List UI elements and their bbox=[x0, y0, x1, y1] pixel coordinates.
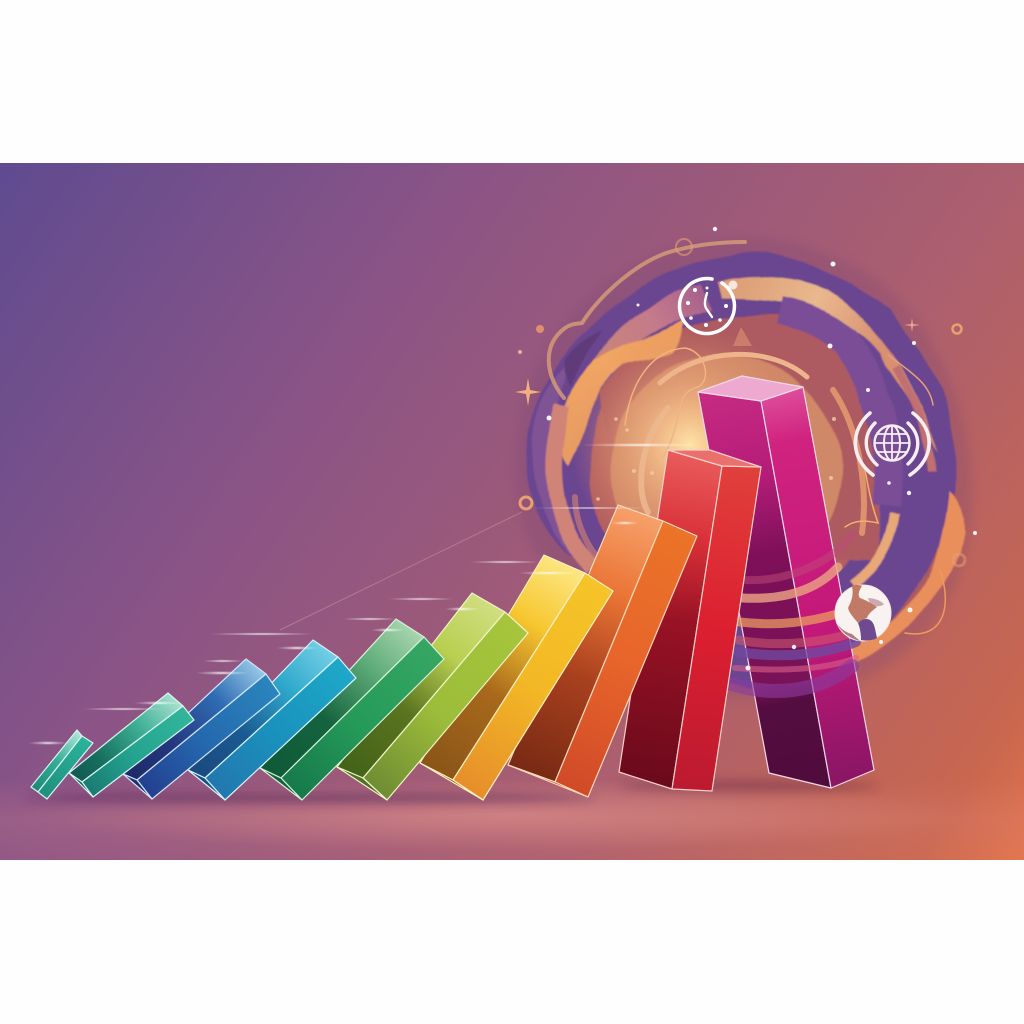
background panel bbox=[0, 163, 1024, 860]
swirl: organic bands bbox=[527, 253, 965, 695]
swirl bands over magenta bar bbox=[732, 535, 860, 691]
tan inner ring right bbox=[853, 515, 895, 585]
earth: lower left sea bbox=[837, 624, 860, 641]
inner purple band right bbox=[780, 310, 888, 507]
swirl: central glow bbox=[570, 325, 810, 565]
floor glow and shadows bbox=[0, 779, 1024, 860]
orange ring right thin bbox=[895, 368, 932, 470]
bar: orange bbox=[508, 505, 697, 797]
earth: brown land detail bbox=[868, 598, 884, 606]
orange dots bbox=[536, 325, 544, 333]
mauve left band bbox=[533, 360, 578, 560]
diagonal motion line bbox=[280, 512, 522, 630]
bar: lime bbox=[337, 593, 528, 800]
rust inner disc bbox=[589, 324, 881, 616]
bar: teal bbox=[69, 693, 194, 797]
swirl vortex bbox=[514, 238, 972, 700]
earth: land gap upper bbox=[848, 585, 877, 623]
pink upper left band bbox=[588, 285, 712, 372]
peach inner disc bbox=[609, 354, 841, 586]
bar: small teal bbox=[31, 730, 93, 799]
rings bbox=[520, 239, 965, 566]
sparkle: small bbox=[904, 318, 920, 332]
earth: land gap lower bbox=[858, 619, 877, 641]
tan top band bbox=[718, 277, 938, 450]
icon: earth sphere bbox=[835, 585, 891, 641]
peach dots bbox=[596, 417, 836, 501]
white dots bbox=[546, 227, 977, 671]
rust upper fill bbox=[600, 314, 880, 560]
bar: red bbox=[619, 450, 761, 791]
sparkle: large bbox=[515, 378, 541, 406]
swirl: soft halo bbox=[514, 238, 972, 700]
sparkles and dots bbox=[515, 227, 977, 671]
swirl: outer arcs bbox=[549, 242, 945, 634]
bar: magenta bbox=[698, 376, 874, 788]
purple body bbox=[527, 253, 956, 695]
outer ring left bbox=[554, 405, 592, 568]
icon: clock bbox=[679, 279, 738, 334]
bar: yellow bbox=[420, 555, 613, 800]
bar: cyan bbox=[188, 640, 356, 800]
speed lines bbox=[28, 443, 700, 745]
orange left band bbox=[560, 320, 682, 467]
orange big lower right bbox=[815, 490, 965, 667]
bar: green bbox=[260, 619, 444, 800]
icon: globe with signal arcs bbox=[855, 413, 929, 475]
plum patch bbox=[564, 330, 602, 388]
bar: blue bbox=[123, 659, 280, 799]
inner purple patch left bbox=[570, 420, 606, 566]
swirl: small triangle bbox=[733, 327, 752, 346]
